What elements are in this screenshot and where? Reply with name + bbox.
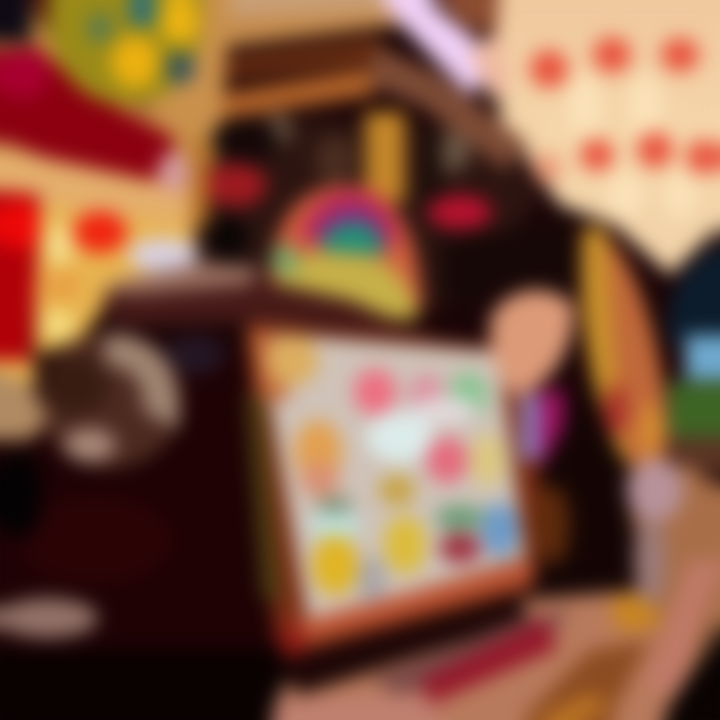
bottom left shadow <box>0 650 285 720</box>
panel: orange oval drum <box>581 228 668 478</box>
panel: lower left dark maroon <box>0 340 290 720</box>
panel: lower right pink fabric <box>625 458 720 720</box>
panel: skin patch and purple cloth <box>490 290 573 470</box>
shelf ledge <box>100 280 440 340</box>
panel: dark area right of arch <box>440 222 578 315</box>
panel: wooden roof <box>155 0 530 170</box>
panel: cream band and yellow wall <box>0 148 198 385</box>
panel: bottom floor <box>270 588 720 720</box>
icon: yellow-green ornament <box>48 0 204 105</box>
panel: right background sky and foliage <box>668 245 720 472</box>
tan band on shelf <box>100 262 260 295</box>
purple shadow <box>165 335 225 375</box>
panel: right dark gap <box>535 380 640 600</box>
icon: brown fluffy blob <box>0 332 182 539</box>
panel: central dark interior <box>190 110 540 310</box>
deep red glow <box>15 495 175 585</box>
panel: upper right lantern canopy <box>495 0 720 275</box>
panel: red banner top left <box>0 0 230 200</box>
brown shadow below board <box>534 485 570 565</box>
icon: rainbow arch <box>268 185 422 320</box>
grey highlights in interior <box>264 114 470 184</box>
central orange post <box>365 112 405 202</box>
red and dark figures <box>190 118 492 260</box>
panel: sticker board <box>245 322 545 660</box>
icon: pale blob lower left <box>0 598 98 638</box>
